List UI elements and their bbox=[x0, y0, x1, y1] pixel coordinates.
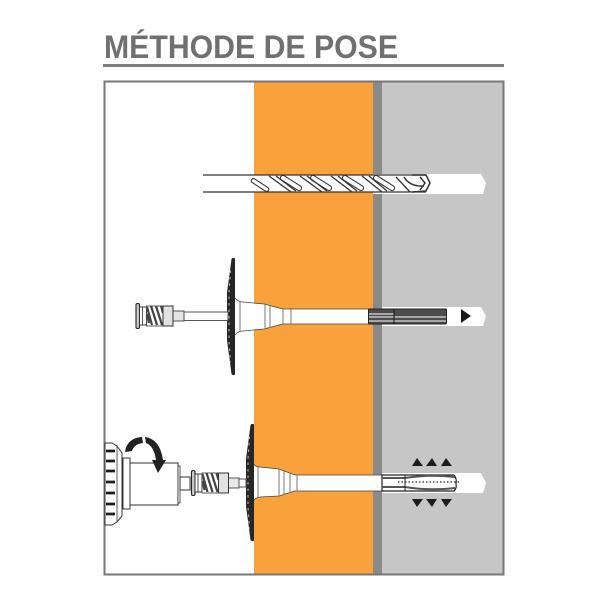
icon: screwdriver tool bbox=[105, 443, 190, 525]
render layer bbox=[373, 82, 382, 574]
screw head bbox=[136, 304, 173, 328]
fastener body bbox=[235, 298, 369, 335]
drill flutes bbox=[250, 175, 396, 192]
panel: wall cross-section bbox=[105, 82, 503, 574]
arrow: insertion direction bbox=[461, 309, 471, 323]
panel frame bbox=[104, 82, 504, 574]
drill body bbox=[203, 175, 430, 192]
screw head bbox=[192, 470, 228, 496]
concrete layer bbox=[382, 82, 503, 574]
title rule bbox=[103, 64, 504, 67]
rod bbox=[228, 478, 239, 488]
washer disc bbox=[227, 258, 235, 375]
arrows: expansion up bbox=[412, 458, 452, 466]
expansion sleeve bbox=[368, 309, 446, 324]
step 1: drill bit in hole bbox=[203, 174, 486, 194]
expanded sleeve bbox=[382, 475, 456, 491]
arrows: expansion down bbox=[412, 499, 452, 507]
fastener body bbox=[253, 463, 382, 501]
step 2: fastener inserted bbox=[136, 258, 486, 375]
drilled hole bbox=[373, 174, 486, 194]
rod bbox=[184, 312, 228, 320]
insulation layer bbox=[254, 82, 373, 574]
arrow: rotation bbox=[125, 437, 166, 473]
title: MÉTHODE DE POSE bbox=[104, 29, 398, 65]
washer disc bbox=[246, 424, 254, 541]
bore hole bbox=[382, 473, 486, 493]
drill tip bbox=[404, 175, 430, 192]
bore hole bbox=[382, 307, 486, 326]
step 3: screwing and expansion bbox=[192, 424, 486, 541]
